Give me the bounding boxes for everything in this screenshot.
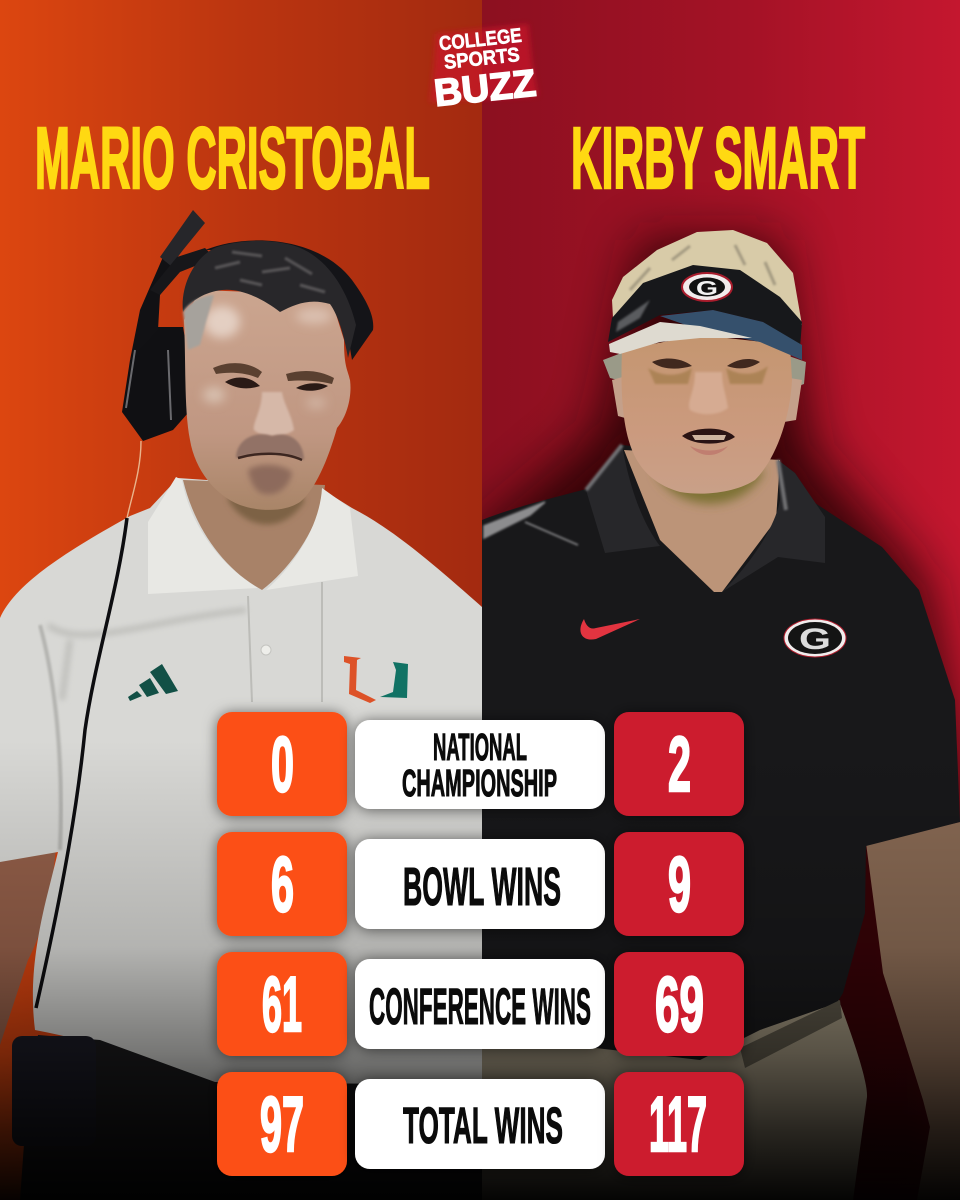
- stat row: Conference Wins: 61: [262, 960, 302, 1048]
- shirt fold: [48, 610, 246, 700]
- lower lip: [690, 446, 728, 455]
- dark glow behind figure: [470, 240, 960, 1200]
- nose: [254, 392, 294, 436]
- Nike swoosh: [580, 619, 640, 640]
- ears: [612, 376, 802, 422]
- Cristobal value box: [217, 1072, 347, 1176]
- adidas logo: [128, 664, 178, 701]
- logo red banner: [430, 24, 538, 102]
- chest G logo: [784, 619, 846, 657]
- Smart value box: [614, 1072, 744, 1176]
- under-chin shadow: [655, 470, 765, 504]
- stat row: Conference Wins: CONFERENCE WINS: [369, 978, 591, 1035]
- U logo green side: [380, 662, 408, 698]
- right arm: [866, 822, 960, 1200]
- hair highlights: [215, 252, 325, 292]
- label: CHAMPIONSHIP: [402, 763, 557, 805]
- khaki trousers: [482, 998, 867, 1200]
- visor G logo: G: [696, 278, 718, 300]
- label: TOTAL WINS: [403, 1097, 563, 1154]
- logo text: [428, 24, 538, 115]
- nose: [689, 372, 728, 414]
- bottom dark fade: [0, 740, 960, 1200]
- mouth: [682, 429, 735, 444]
- label box: [355, 1079, 605, 1169]
- headset earcup and boom: [122, 210, 215, 441]
- Smart value box: [614, 712, 744, 816]
- stat row: Total Wins: 117: [649, 1080, 707, 1168]
- Smart value: 69: [655, 960, 704, 1048]
- Smart value: 9: [668, 840, 691, 928]
- stat row: Conference Wins: [217, 952, 744, 1056]
- band sheen: [616, 300, 650, 332]
- background: right red panel: [482, 0, 960, 1200]
- chin: [248, 465, 292, 494]
- visor brim blue: [660, 310, 802, 360]
- stat row: Bowl Wins: [217, 832, 744, 936]
- sleeve crease: [40, 625, 61, 850]
- Smart value box: [614, 832, 744, 936]
- label box: [355, 720, 605, 809]
- headset cable: [36, 518, 127, 1008]
- Cristobal value box: [217, 712, 347, 816]
- left arm: [0, 848, 56, 1045]
- photo: Mario Cristobal: [0, 210, 482, 1200]
- hair: [183, 241, 356, 358]
- label box: [355, 839, 605, 929]
- headband: [205, 240, 373, 360]
- blond hair: [612, 230, 802, 325]
- Cristobal value box: [217, 832, 347, 936]
- shoulder highlights: [484, 502, 578, 545]
- neck: [183, 480, 325, 590]
- visor brim white: [609, 322, 752, 354]
- collar: [586, 445, 825, 592]
- U logo: [344, 656, 376, 703]
- stat row: Bowl Wins: BOWL WINS: [403, 857, 561, 917]
- chest G logo: G: [799, 623, 831, 656]
- Cristobal value: 6: [271, 840, 294, 928]
- black polo shirt: [482, 445, 960, 1060]
- text: MARIO CRISTOBAL: [35, 110, 430, 207]
- face: [621, 335, 792, 494]
- stat row: Total Wins: [217, 1072, 744, 1176]
- neck: [624, 450, 780, 592]
- radio pack: [12, 1036, 96, 1146]
- brows: [213, 363, 334, 384]
- upper lip shadow: [236, 434, 304, 460]
- belt: [740, 1000, 842, 1068]
- cable upper thin: [127, 441, 141, 518]
- dark trousers and belt: [20, 1035, 482, 1200]
- eyes: [225, 377, 328, 391]
- Smart value: 2: [668, 720, 691, 808]
- white polo shirt: [0, 478, 482, 1090]
- collar: [148, 477, 358, 594]
- logo text: SPORTS: [443, 44, 521, 74]
- Cristobal value: 97: [260, 1080, 304, 1168]
- stat row: National Championship: [217, 712, 744, 816]
- neck shadow: [226, 498, 306, 527]
- eye sockets: [648, 366, 768, 384]
- logo text: COLLEGE: [438, 25, 523, 55]
- grey temple hair: [183, 295, 214, 350]
- forehead highlights: [203, 306, 332, 409]
- label: [402, 727, 557, 805]
- side hair: [603, 352, 806, 390]
- background: left orange panel: [0, 0, 482, 1200]
- visor band: [608, 265, 802, 348]
- Cristobal value box: [217, 952, 347, 1056]
- placket: [248, 582, 322, 702]
- collar edge highlight: [586, 445, 786, 510]
- Cristobal value: 0: [271, 720, 294, 808]
- logo: College Sports Buzz: [428, 24, 538, 115]
- hair streaks: [630, 245, 775, 290]
- mouth line: [238, 454, 302, 460]
- face: [184, 290, 350, 510]
- visor G logo: [682, 273, 732, 301]
- Smart value box: [614, 952, 744, 1056]
- label: NATIONAL: [433, 727, 527, 769]
- button: [261, 645, 271, 655]
- label box: [355, 959, 605, 1049]
- teeth: [692, 435, 726, 440]
- photo: Kirby Smart: [470, 230, 960, 1200]
- eyes: [652, 359, 760, 369]
- logo text: BUZZ: [432, 63, 538, 115]
